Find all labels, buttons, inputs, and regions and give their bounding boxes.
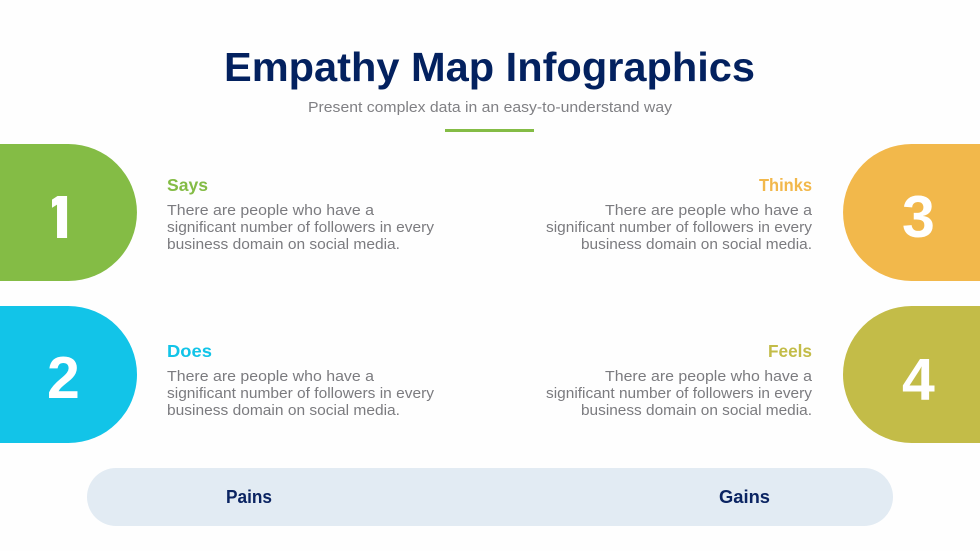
panel: 3 thinks xyxy=(546,144,980,281)
body text: does: business domain on social media. xyxy=(167,402,400,419)
subtitle: Present complex data in an easy-to-understand way xyxy=(308,99,673,116)
title underline xyxy=(445,129,534,132)
body text: thinks: significant number of followers in every xyxy=(546,219,813,236)
body text: does: There are people who have a xyxy=(167,368,375,385)
body text: says: significant number of followers in every xyxy=(167,219,435,236)
badge 4 xyxy=(843,306,980,443)
number 3: 3 xyxy=(902,184,935,250)
panel: 1 says xyxy=(0,144,435,281)
number 2: 2 xyxy=(47,345,80,411)
body text: does: significant number of followers in every xyxy=(167,385,435,402)
bar background xyxy=(87,468,893,526)
label: pains: Pains xyxy=(226,487,272,507)
heading: says: Says xyxy=(167,175,208,195)
panel: pains and gains bar xyxy=(87,468,893,526)
body text: says: There are people who have a xyxy=(167,202,375,219)
heading: thinks: Thinks xyxy=(759,175,812,195)
number 1: 1 xyxy=(40,182,81,262)
body text: says: business domain on social media. xyxy=(167,236,400,253)
heading: does: Does xyxy=(167,341,212,361)
body text: feels: There are people who have a xyxy=(605,368,813,385)
label: gains: Gains xyxy=(719,487,770,507)
badge 1 xyxy=(0,144,137,281)
body text: thinks: business domain on social media. xyxy=(581,236,812,253)
panel: 4 feels xyxy=(546,306,980,443)
badge 3 xyxy=(843,144,980,281)
body text: feels: business domain on social media. xyxy=(581,402,812,419)
heading: feels: Feels xyxy=(768,341,812,361)
body text: feels: significant number of followers in every xyxy=(546,385,813,402)
number 4: 4 xyxy=(902,347,935,413)
badge 2 xyxy=(0,306,137,443)
panel: 2 does xyxy=(0,306,435,443)
body text: thinks: There are people who have a xyxy=(605,202,813,219)
title: Empathy Map Infographics xyxy=(224,44,755,90)
